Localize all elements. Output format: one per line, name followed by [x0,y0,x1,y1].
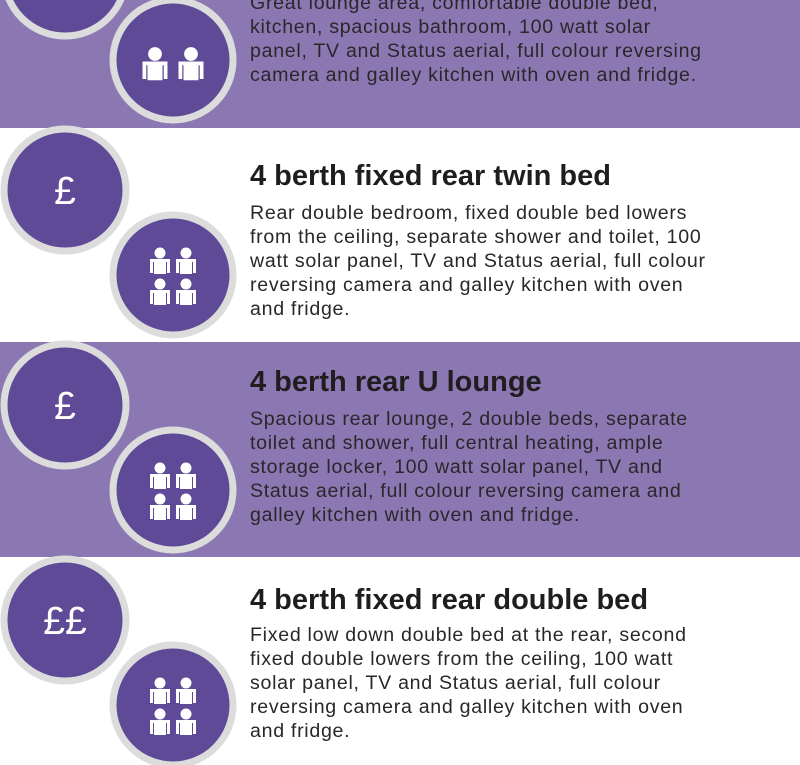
text: double bed body: Fixed low down double bed at the rear, second [250,624,687,646]
text: U lounge body [250,408,688,526]
icon: £ U lounge: £ [54,385,76,428]
icon: 4 people double bed [113,645,233,765]
text: top section body: panel, TV and Status aerial, full colour reversing [250,40,702,62]
text: double bed body: and fridge. [250,720,350,742]
text: top section body [250,0,702,86]
text: twin bed body: watt solar panel, TV and Status aerial, full colour [250,250,706,272]
icon: top price circle (partial) [4,0,126,36]
icon: 4 people U lounge [113,430,233,550]
icon: £ twin bed [4,129,126,251]
band: U lounge section [0,342,800,557]
text: top section body: kitchen, spacious bathroom, 100 watt solar [250,16,651,38]
text: twin bed body: and fridge. [250,298,350,320]
text: twin bed body: from the ceiling, separate shower and toilet, 100 [250,226,701,248]
text: U lounge body: Spacious rear lounge, 2 double beds, separate [250,408,688,430]
icon: ££ double bed [4,559,126,681]
text: double bed body: fixed double lowers from the ceiling, 100 watt [250,648,673,670]
text: U lounge body: galley kitchen with oven and fridge. [250,504,580,526]
text: twin bed body: Rear double bedroom, fixed double bed lowers [250,202,687,224]
text: double bed body: solar panel, TV and Status aerial, full colour [250,672,661,694]
icon: 2 people [113,0,233,120]
text: twin bed body [250,202,706,320]
icon: 4 people twin bed [113,215,233,335]
text: U lounge body: Status aerial, full colour reversing camera and [250,480,682,502]
icon: £ twin bed: £ [54,170,76,213]
band: top section [0,0,800,128]
icon: ££ double bed: ££ [43,600,87,643]
icon: £ U lounge [4,344,126,466]
text: U lounge body: toilet and shower, full central heating, ample [250,432,663,454]
text: double bed body: reversing camera and galley kitchen with oven [250,696,683,718]
text: double bed body [250,624,687,742]
text: twin bed body: reversing camera and galley kitchen with oven [250,274,683,296]
text: U lounge body: storage locker, 100 watt solar panel, TV and [250,456,663,478]
text: top section body: camera and galley kitchen with oven and fridge. [250,64,697,86]
heading: twin bed: 4 berth fixed rear twin bed [250,160,611,192]
heading: double bed: 4 berth fixed rear double bed [250,584,648,616]
heading: U lounge: 4 berth rear U lounge [250,366,542,398]
